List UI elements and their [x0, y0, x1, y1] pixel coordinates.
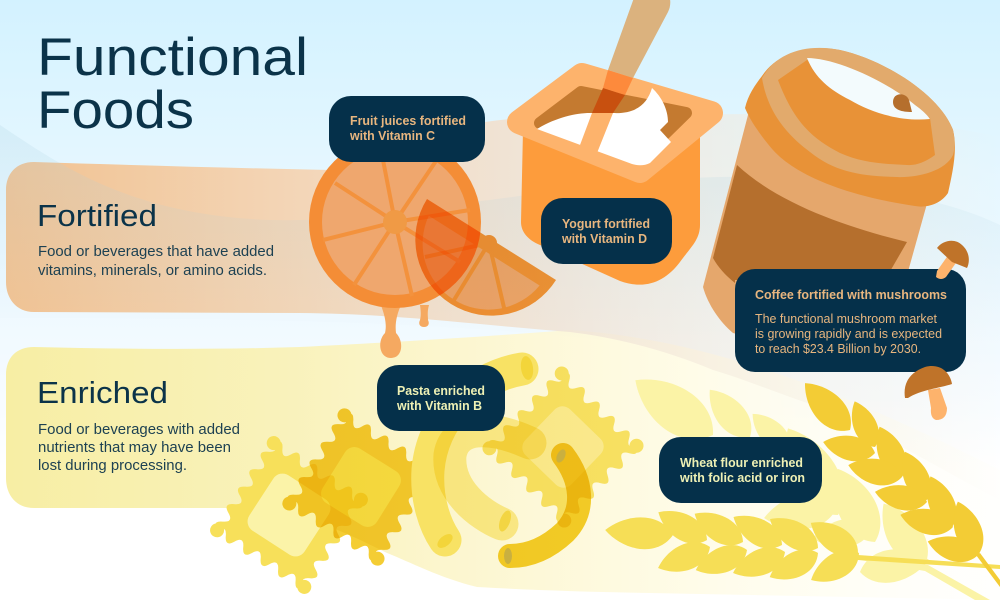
illustration: upper wheat stalk: [794, 373, 1000, 587]
heading: enriched: Enriched: [37, 375, 168, 410]
callout: pasta: with Vitamin B: [396, 399, 482, 413]
illustration: pale wheat stalk: [622, 363, 990, 600]
callout: pasta: [377, 365, 505, 431]
illustration: long macaroni: [428, 355, 535, 551]
callout: coffee: [735, 269, 966, 372]
background wave: [0, 125, 1000, 420]
illustration: pale macaroni: [450, 431, 530, 533]
text: fortified description: vitamins, minerals, or amino acids.: [38, 263, 267, 279]
callout: yogurt: [541, 198, 672, 264]
callout: yogurt: with Vitamin D: [561, 232, 647, 246]
callout: coffee: The functional mushroom market: [755, 312, 938, 326]
heading: fortified: Fortified: [37, 198, 157, 233]
illustration: right ravioli: [480, 364, 646, 530]
callout: wheat flour: with folic acid or iron: [679, 471, 805, 485]
callout: coffee: is growing rapidly and is expected: [755, 327, 942, 341]
illustration: top mushroom: [936, 241, 969, 279]
text: enriched description: nutrients that may have been: [38, 440, 231, 456]
text: enriched description: lost during processing.: [38, 458, 187, 474]
callout: fruit juices: Fruit juices fortified: [350, 114, 466, 128]
illustration: middle ravioli: [280, 406, 442, 568]
callout: fruit juices: [329, 96, 485, 162]
illustration: coffee cup: [703, 48, 955, 372]
illustration: left ravioli: [207, 433, 371, 597]
illustration: bottom macaroni: [504, 448, 579, 564]
text: enriched description: Food or beverages with added: [38, 422, 240, 438]
callout: coffee: Coffee fortified with mushrooms: [755, 288, 947, 302]
illustration: orange slice: [309, 136, 481, 308]
illustration: orange wedge: [415, 199, 556, 316]
callout: wheat flour: [659, 437, 822, 503]
callout: coffee: to reach $23.4 Billion by 2030.: [755, 342, 921, 356]
title: [37, 28, 308, 140]
callout: yogurt: Yogurt fortified: [562, 217, 650, 231]
illustration: yogurt cup: [519, 0, 711, 285]
illustration: bottom mushroom: [905, 366, 952, 420]
text: fortified description: [38, 244, 274, 279]
title: Foods: [37, 81, 194, 140]
text: enriched description: [38, 422, 240, 474]
illustration: lower wheat stalk: [604, 501, 1000, 592]
callout: pasta: Pasta enriched: [397, 384, 485, 398]
title: Functional: [37, 28, 308, 87]
callout: fruit juices: with Vitamin C: [349, 129, 435, 143]
panel: enriched band: [6, 330, 1000, 600]
text: fortified description: Food or beverages that have added: [38, 244, 274, 260]
panel: fortified band: [6, 114, 1000, 500]
illustration: juice drips: [380, 303, 429, 358]
callout: wheat flour: Wheat flour enriched: [680, 456, 803, 470]
